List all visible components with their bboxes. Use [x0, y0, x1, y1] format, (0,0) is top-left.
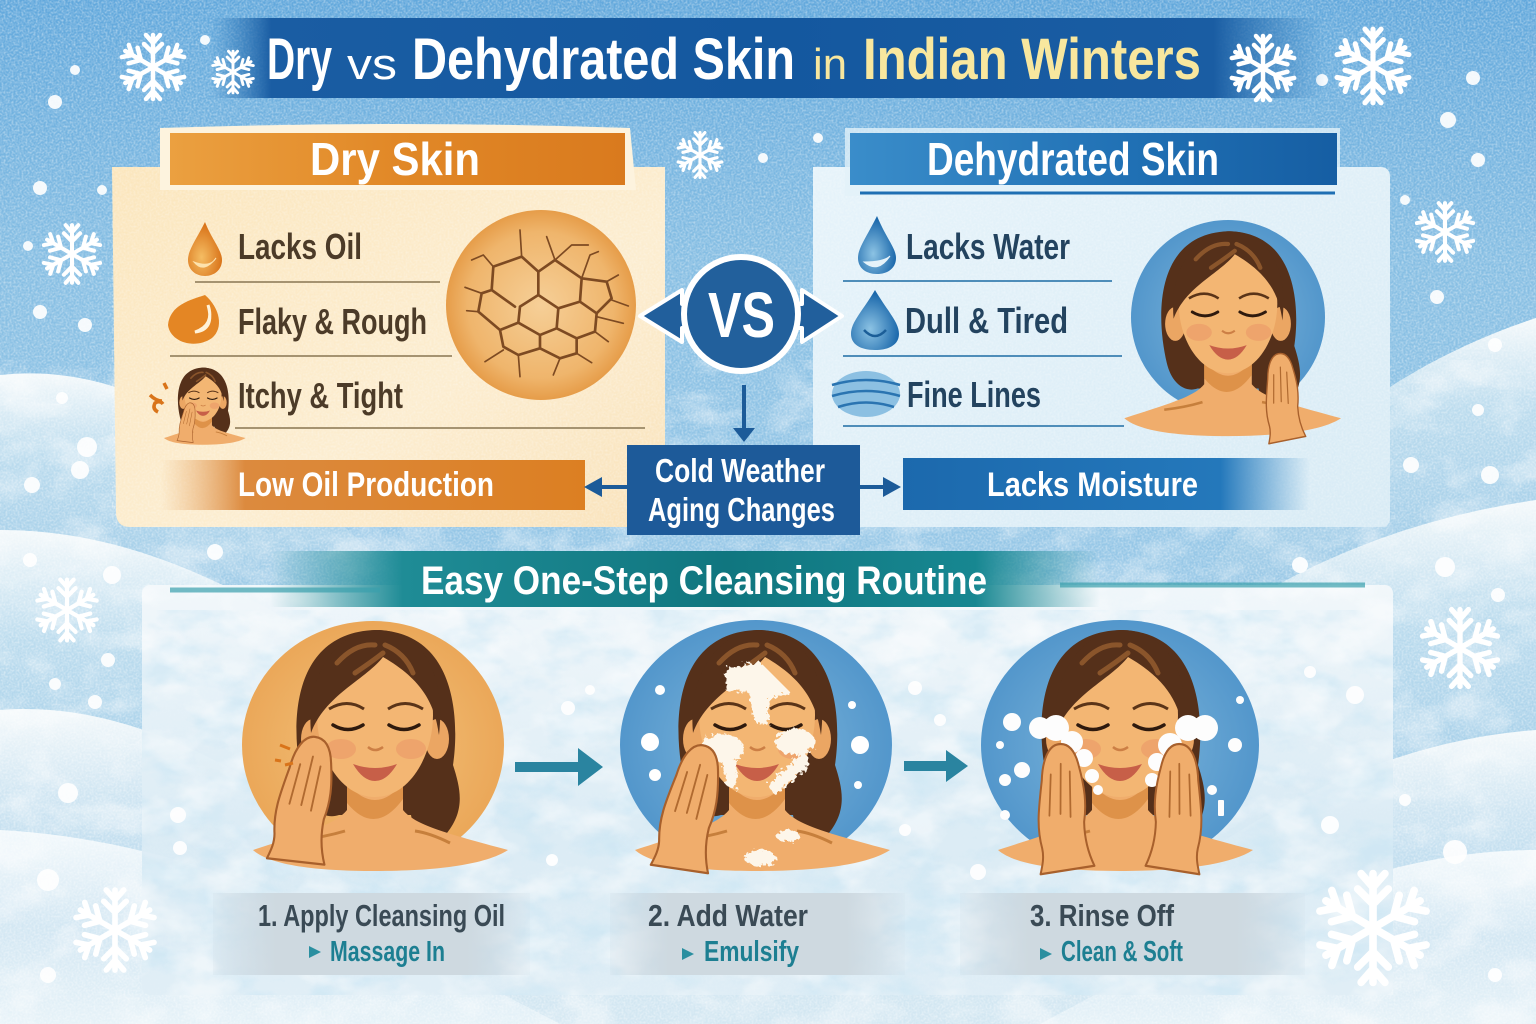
title: in: [813, 40, 847, 89]
title: [267, 27, 1201, 92]
bar: low oil production: [160, 460, 585, 510]
icon: fine lines: [832, 371, 900, 417]
arrow: step 1 to 2: [515, 748, 603, 786]
step 1 caption: Massage In: [330, 936, 445, 968]
title: Dry: [267, 27, 332, 92]
arrow: step 2 to 3: [904, 750, 968, 782]
title banner: [210, 18, 1325, 98]
box: causes: [627, 445, 860, 535]
panel: routine: [142, 551, 1393, 995]
icon: flaky skin: [168, 295, 219, 344]
arrow: causes to lacks moisture: [858, 477, 901, 497]
arrow: vs down to causes: [733, 385, 755, 442]
vs badge: [640, 254, 842, 374]
dry skin heading: [160, 124, 636, 190]
step 3 illustration: [981, 620, 1259, 874]
step 1 illustration: [242, 621, 508, 871]
routine heading: Easy One-Step Cleansing Routine: [421, 559, 987, 603]
step 2 caption: [610, 893, 905, 975]
dry skin heading: Dry Skin: [310, 133, 480, 185]
bar: lacks moisture: Lacks Moisture: [987, 466, 1198, 504]
step 1 caption: [213, 893, 530, 975]
text: itchy and tight: Itchy & Tight: [238, 375, 403, 416]
icon: water drop: [858, 216, 896, 274]
text: flaky and rough: Flaky & Rough: [238, 301, 427, 342]
dehydrated skin heading: Dehydrated Skin: [927, 133, 1219, 185]
box: causes: Cold Weather: [655, 452, 825, 489]
step 3 caption: Clean & Soft: [1061, 936, 1183, 968]
bar: low oil production: Low Oil Production: [238, 466, 494, 504]
dehydrated woman portrait: [1124, 220, 1341, 444]
panel: dehydrated skin: [813, 128, 1390, 527]
cracked skin circle: [446, 210, 636, 400]
box: causes: Aging Changes: [648, 491, 835, 528]
text: dull and tired: Dull & Tired: [905, 300, 1068, 341]
panel: dry skin: [112, 124, 665, 527]
title: Indian Winters: [863, 27, 1201, 92]
title: Dehydrated Skin: [412, 27, 795, 92]
icon: dull droplet: [851, 290, 899, 350]
arrow: causes to low oil: [584, 477, 630, 497]
step 3 caption: 3. Rinse Off: [1030, 898, 1175, 933]
icon: itchy woman: [150, 368, 246, 445]
text: lacks water: Lacks Water: [906, 226, 1070, 267]
snowflakes and dots over routine panel: [75, 666, 1428, 982]
title: vs: [347, 40, 397, 89]
dehydrated skin heading: [845, 128, 1340, 196]
vs badge: VS: [708, 279, 775, 351]
snowflakes: [36, 29, 1499, 686]
text: fine lines: Fine Lines: [907, 374, 1041, 415]
text: lacks oil: Lacks Oil: [238, 226, 362, 267]
step 2 caption: Emulsify: [704, 936, 799, 968]
step 2 caption: 2. Add Water: [648, 898, 808, 933]
step 2 illustration: [620, 620, 892, 873]
routine heading: [170, 551, 1365, 607]
bar: lacks moisture: [903, 458, 1310, 510]
step 3 caption: [960, 893, 1305, 975]
icon: oil drop: [188, 222, 222, 276]
step 1 caption: 1. Apply Cleansing Oil: [258, 898, 505, 933]
